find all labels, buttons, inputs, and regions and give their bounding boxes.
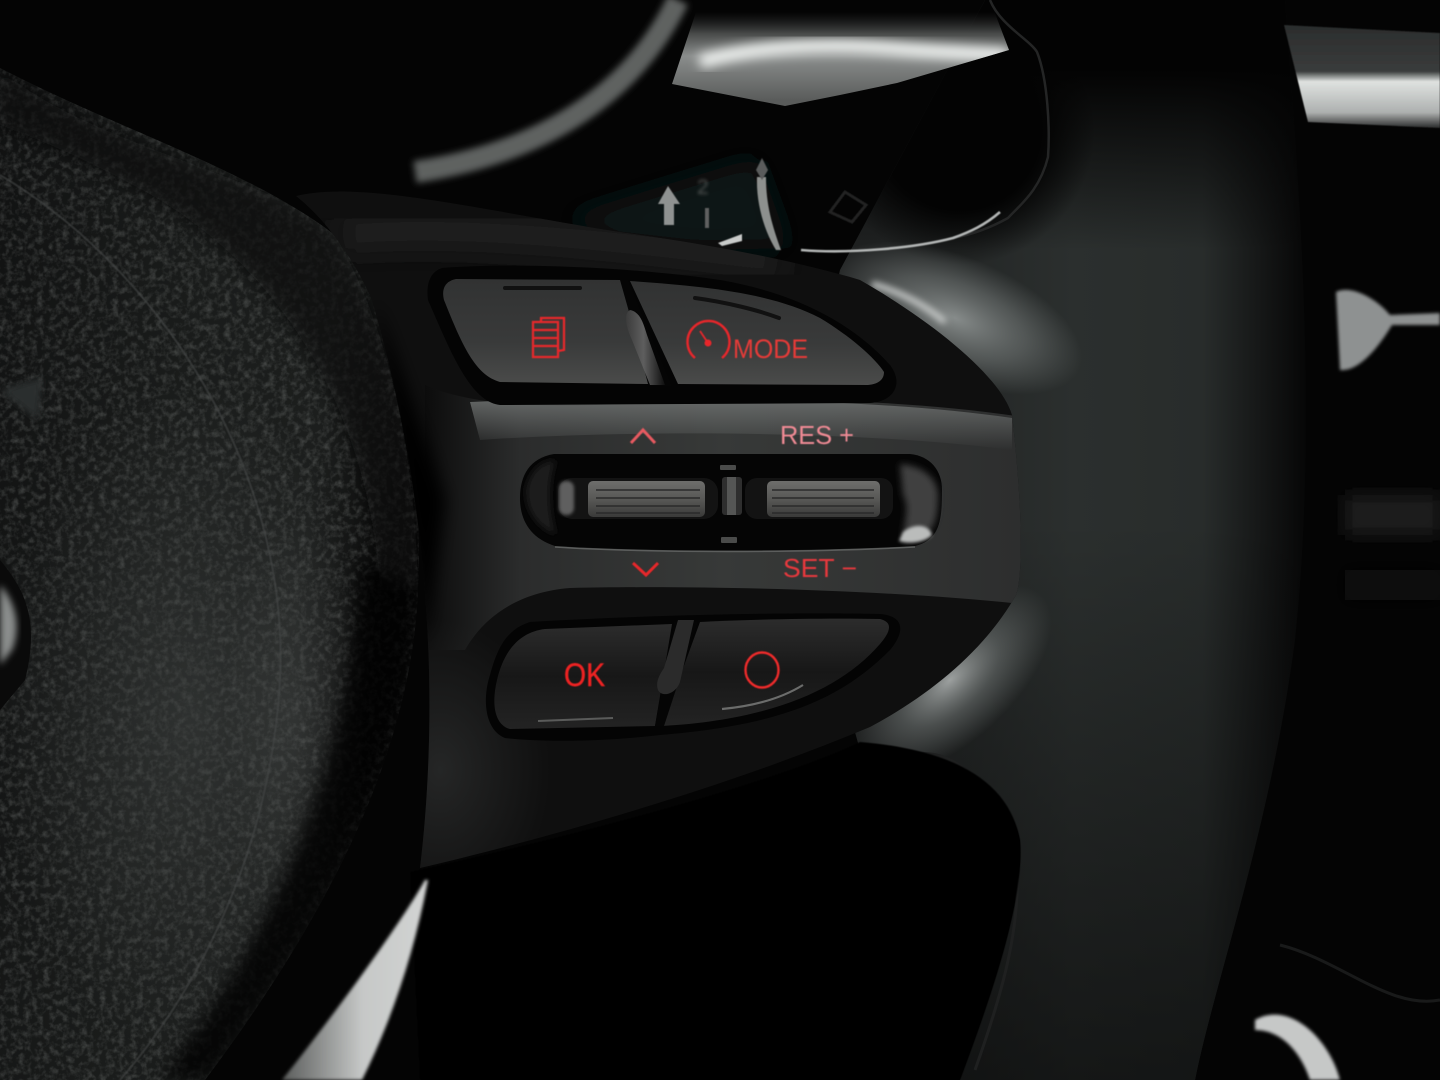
chevron down bbox=[633, 563, 658, 575]
left hub with leather airbag cover bbox=[0, 0, 430, 1080]
label: OK: OK bbox=[564, 657, 605, 693]
cruise rocker recess bbox=[520, 454, 942, 552]
top button bezel bbox=[428, 266, 896, 405]
button: speedometer mode bbox=[630, 281, 884, 385]
control panel housing bbox=[296, 191, 1030, 920]
stalk wiper markings bbox=[560, 157, 866, 250]
stalk highlight behind wheel bbox=[672, 16, 1009, 106]
button: document menu bbox=[443, 279, 648, 384]
label: MODE: MODE bbox=[733, 334, 808, 364]
shadow under panel at bottom of spoke bbox=[282, 742, 1020, 1080]
label: SET -: SET − bbox=[783, 553, 857, 583]
button: circle bbox=[662, 619, 889, 726]
icon: circle bbox=[746, 652, 778, 688]
right edge: dashboard vent highlights bbox=[1255, 25, 1440, 1080]
label: RES +: RES + bbox=[780, 420, 854, 450]
icon: document pages bbox=[533, 318, 564, 357]
stitched leather seam bbox=[801, 0, 1049, 1070]
button: OK bbox=[494, 624, 672, 729]
icon: speedometer gauge bbox=[688, 321, 729, 358]
divider between lower buttons bbox=[655, 620, 698, 726]
centre pivot bbox=[720, 465, 742, 543]
chevron up bbox=[631, 430, 655, 443]
lower button bezel bbox=[486, 613, 900, 741]
upper silver wheel arc bbox=[415, 0, 678, 172]
divider between top buttons bbox=[620, 280, 672, 386]
right spoke of steering wheel bbox=[839, 2, 1290, 1080]
right rocker switch bbox=[745, 478, 893, 519]
stalk wiper markings: 2 bbox=[697, 176, 709, 199]
left rocker switch bbox=[558, 478, 718, 519]
